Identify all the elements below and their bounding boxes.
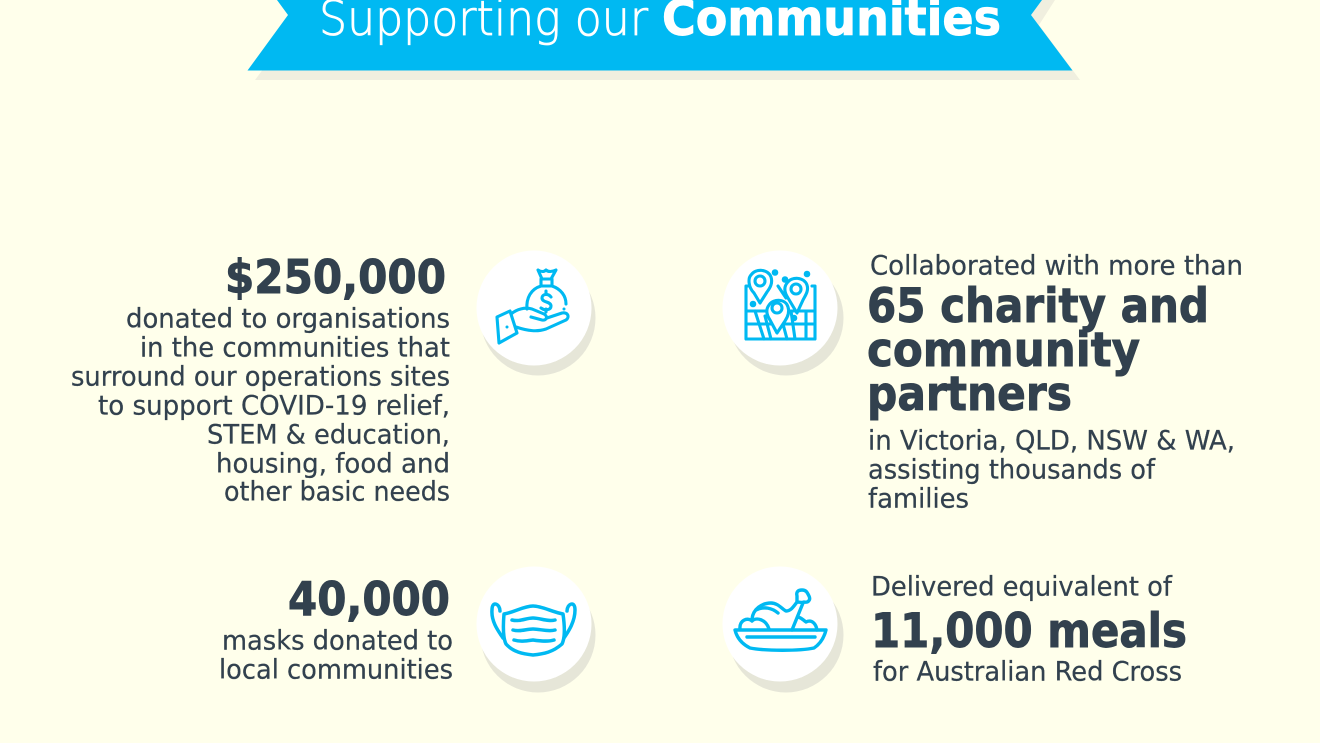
donation figure: $250,000	[225, 250, 446, 304]
partners figure: community	[867, 323, 1140, 378]
masks description: local communities	[219, 654, 453, 686]
donation description: donated to organisations	[126, 304, 450, 334]
masks description: masks donated to	[222, 626, 453, 656]
donation description: other basic needs	[224, 476, 450, 508]
donation description: STEM & education,	[207, 420, 450, 450]
donation description: in the communities that	[140, 332, 450, 364]
donation description	[71, 304, 450, 508]
panel: donation	[71, 250, 596, 508]
partners figure: 65 charity and	[867, 279, 1209, 334]
panel: partners	[722, 250, 1243, 514]
icon: face mask	[476, 566, 596, 692]
partners figure	[867, 279, 1209, 422]
donation description: housing, food and	[216, 448, 450, 480]
panel: meals	[722, 566, 1187, 692]
title banner	[248, 0, 1080, 80]
partners description	[868, 426, 1235, 514]
icon: map with pins	[722, 250, 844, 376]
donation description: to support COVID-19 relief,	[98, 390, 450, 422]
donation description: surround our operations sites	[71, 362, 450, 392]
partners description: assisting thousands of	[868, 454, 1156, 486]
icon: roast chicken on platter	[722, 566, 844, 692]
panel: masks	[219, 566, 596, 692]
masks description	[219, 626, 453, 686]
partners description: families	[868, 484, 969, 514]
meals intro: Delivered equivalent of	[871, 572, 1173, 602]
masks figure: 40,000	[288, 572, 450, 626]
partners figure: partners	[867, 367, 1072, 422]
meals figure: 11,000 meals	[871, 604, 1187, 659]
partners intro: Collaborated with more than	[870, 250, 1243, 282]
partners description: in Victoria, QLD, NSW & WA,	[868, 426, 1235, 456]
icon: money bag in hand	[476, 250, 596, 376]
meals description: for Australian Red Cross	[873, 656, 1182, 688]
